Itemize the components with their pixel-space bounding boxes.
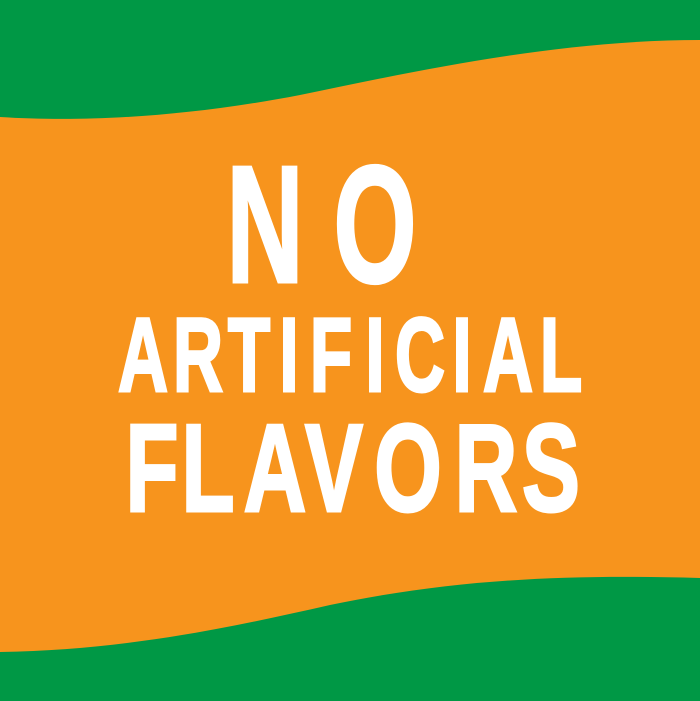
text: FLAVORS — [125, 399, 580, 538]
text: FLAVORS: S — [522, 399, 580, 538]
text: ARTIFICIAL: I — [365, 295, 385, 413]
bottom green wave — [0, 577, 700, 701]
text: ARTIFICIAL: I — [452, 295, 472, 413]
text: FLAVORS: O — [374, 399, 442, 538]
text: ARTIFICIAL: I — [279, 295, 299, 413]
text: ARTIFICIAL: F — [310, 295, 352, 413]
top green wave — [0, 0, 700, 119]
headline text — [118, 131, 582, 538]
text: ARTIFICIAL: R — [173, 295, 223, 413]
text: FLAVORS: A — [244, 399, 306, 538]
text: ARTIFICIAL — [118, 295, 582, 413]
text: FLAVORS: L — [181, 399, 235, 538]
text: ARTIFICIAL: C — [395, 295, 445, 413]
text: ARTIFICIAL: L — [540, 295, 582, 413]
text: NO: O — [333, 131, 417, 318]
text: FLAVORS: V — [305, 399, 363, 538]
text: NO: N — [226, 131, 304, 318]
text: ARTIFICIAL: A — [118, 295, 168, 413]
text: ARTIFICIAL: A — [483, 295, 533, 413]
text: ARTIFICIAL: T — [228, 295, 270, 413]
text: FLAVORS: R — [455, 399, 517, 538]
text: FLAVORS: F — [125, 399, 179, 538]
text: NO — [226, 131, 417, 318]
